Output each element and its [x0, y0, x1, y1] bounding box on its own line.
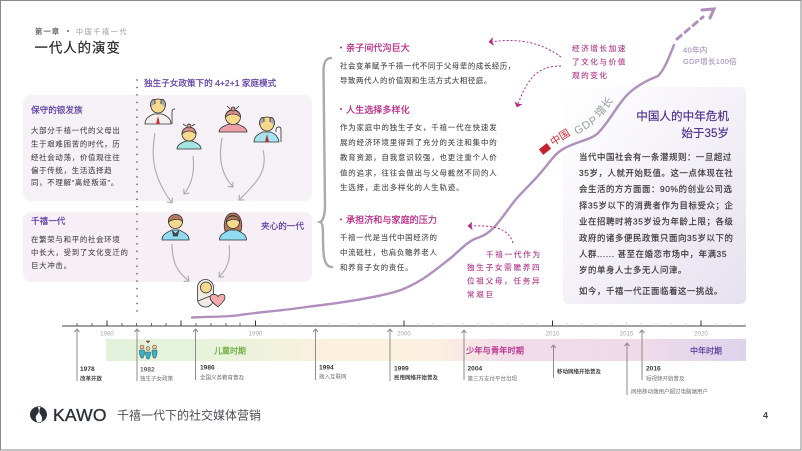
panel: millennials: 千禧一代	[31, 215, 66, 226]
GDP growth curve	[192, 9, 714, 318]
callout: supporting grandparents: 独生子女需赡养四	[467, 262, 541, 272]
panel: conservative elders: 偏于传统，生活选择趋	[31, 166, 112, 175]
event: 1994: 1994	[319, 364, 334, 372]
bracket	[320, 58, 332, 267]
event: 1994	[319, 364, 347, 380]
event: 2004: 第三方支付平台出现	[468, 374, 518, 382]
text block: diverse life choices: 展的经济环境里得到了充分的关注和集中的	[340, 138, 498, 147]
stage label: childhood: 儿童时期	[214, 346, 246, 356]
panel: midlife crisis: 岁的单身人士多无人问津。	[579, 265, 687, 275]
text block: diverse life choices: 教育资源，自我意识较强，也更注重个人价	[340, 153, 498, 162]
GDP note: GDP增长100倍	[683, 56, 737, 66]
family model heading: 独生子女政策下的 4+2+1 家庭模式	[144, 77, 277, 88]
icon: baby with heart	[198, 280, 225, 307]
page number: 4	[763, 410, 768, 420]
callout: supporting grandparents	[467, 249, 542, 299]
dotted arrow: burden	[468, 226, 513, 243]
text block: economic and family pressure: 千禧一代是当代中国经济的	[340, 233, 438, 242]
panel: millennials: 巨大冲击。	[31, 261, 72, 270]
event: 1986	[200, 364, 245, 382]
text block: economic and family pressure: 中流砥柱，也肩负赡养老人	[340, 248, 438, 257]
text block: generation gap	[340, 42, 516, 85]
curve label: China GDP growth	[548, 94, 616, 149]
chapter label	[35, 27, 128, 36]
panel: millennials: 在繁荣与和平的社会环境	[31, 235, 121, 244]
chapter label: 中国千禧一代	[76, 27, 128, 36]
GDP note	[683, 44, 737, 66]
callout: economy accelerates change: 经济增长加速	[572, 43, 627, 53]
curve label: China GDP growth: 增长	[591, 94, 616, 120]
callout: supporting grandparents: 常艰巨	[467, 290, 495, 299]
panel: conservative elders: 大部分千禧一代的父母出	[31, 126, 121, 135]
arrows: parents to child	[172, 244, 230, 281]
icon: grandfather right	[254, 117, 281, 142]
event: 1999: 1999	[394, 366, 409, 372]
KAWO logo: KAWO	[53, 405, 107, 425]
timeline axis: 1990	[249, 330, 263, 338]
event: 1994: 接入互联网	[319, 372, 347, 380]
panel: conservative elders: 保守的银发族	[31, 104, 83, 115]
text block: diverse life choices: 作为家庭中的独生子女，千禧一代在快速发	[340, 123, 498, 132]
sandwich generation label: 夹心的一代	[261, 220, 304, 231]
timeline axis: 2015	[620, 330, 634, 338]
callout: economy accelerates change	[572, 43, 627, 80]
icon: grandmother left	[177, 124, 201, 149]
panel: midlife crisis: 政府的诸多便民政策只面向35岁以下的	[579, 233, 733, 243]
text block: diverse life choices	[340, 104, 498, 192]
chapter label: 第一章	[35, 27, 60, 36]
timeline axis: 2000	[397, 330, 411, 338]
text block: generation gap: 社会变革赋予千禧一代不同于父母辈的成长经历，	[340, 62, 516, 70]
timeline axis: 1980	[100, 330, 114, 338]
event: 2016: 2016	[646, 366, 661, 372]
panel: millennials: 中长大，受到了文化变迁的	[31, 248, 129, 257]
event: 1982	[140, 366, 174, 382]
panel: millennials	[23, 212, 312, 282]
event: 2004: 2004	[468, 366, 483, 372]
icon: grandmother right	[219, 106, 247, 132]
timeline axis: 2020	[694, 330, 708, 338]
panel: midlife crisis	[563, 87, 746, 304]
callout: supporting grandparents: 位祖父母，任务异	[467, 276, 541, 286]
callout: economy accelerates change: 观的变化	[572, 70, 609, 80]
icon: grandfather left	[145, 99, 175, 124]
stage label: youth: 少年与青年时期	[466, 346, 524, 356]
footer title: 千禧一代下的社交媒体营销	[117, 408, 261, 422]
event: 1982: 独生子女政策	[140, 374, 174, 382]
panel: midlife crisis: 35岁，人就开始贬值。这一点体现在社	[579, 168, 733, 178]
title: 一代人的演变	[34, 40, 121, 56]
text block: economic and family pressure	[340, 214, 438, 272]
panel: midlife crisis: 会生活的方方面面：90%的创业公司选	[579, 184, 733, 194]
dotted arrows: culture change	[489, 41, 561, 107]
panel: conservative elders: 经社会动荡，价值观往往	[31, 153, 121, 162]
panel: midlife crisis: 择35岁以下的消费者作为目标受众；企	[579, 200, 733, 210]
timeline axis	[62, 320, 746, 338]
text block: economic and family pressure: 承担济和与家庭的压力	[346, 214, 437, 225]
icon: one-child family	[140, 341, 157, 359]
dotted divider	[136, 80, 138, 314]
timeline axis: 2010	[546, 330, 560, 338]
event: 1978: 1978	[80, 366, 95, 373]
event arrows	[74, 329, 644, 395]
panel: midlife crisis: 业在招聘时将35岁设为年龄上限；各级	[579, 216, 733, 226]
text block: economic and family pressure: 和养育子女的责任。	[340, 263, 413, 272]
text block: diverse life choices: 人生选择多样化	[346, 104, 410, 115]
event: 1978: 改革开放	[80, 374, 103, 382]
event: 2016	[646, 366, 685, 382]
event: 1978	[80, 366, 103, 382]
curve label: China GDP growth: 中国	[548, 126, 572, 149]
panel: midlife crisis: 当代中国社会有一条潜规则：一旦超过	[579, 152, 732, 162]
icon: China flag	[539, 143, 551, 155]
GDP note: 40年内	[683, 44, 708, 54]
stage label: middle age: 中年时期	[690, 346, 722, 356]
event: 1982: 1982	[140, 366, 155, 374]
icon: father	[162, 214, 189, 240]
callout: economy accelerates change: 了文化与价值	[572, 56, 627, 66]
life stage band	[106, 339, 746, 361]
event: 1986: 1986	[200, 364, 215, 372]
panel: conservative elders: 同，不理解“离经叛道”。	[31, 178, 119, 187]
event: 1999	[394, 366, 439, 382]
event: 2004	[468, 366, 518, 382]
panel: conservative elders: 生于艰难困苦的时代，历	[31, 140, 121, 148]
panel: midlife crisis: 中国人的中年危机	[636, 109, 729, 123]
icon: mother	[220, 213, 246, 240]
event: 2016: 短视频开始普及	[646, 374, 685, 382]
text block: diverse life choices: 生选择，走出多样化的人生轨迹。	[340, 183, 464, 192]
arrows: grandparents to parents	[153, 133, 264, 203]
panel: conservative elders	[23, 95, 312, 201]
event: 2015: 网络移动端用户超过电脑端用户	[631, 388, 708, 396]
panel: midlife crisis: 如今，千禧一代正面临着这一挑战。	[579, 286, 723, 296]
event: 2010: 移动网络开始普及	[557, 368, 602, 376]
event: 1999: 民用网络开始普及	[394, 374, 439, 382]
panel: midlife crisis: 始于35岁	[681, 126, 729, 140]
curve label: China GDP growth: GDP	[572, 114, 600, 138]
text block: generation gap: 亲子间代沟巨大	[346, 42, 410, 53]
KAWO logo	[30, 405, 107, 425]
panel: midlife crisis: 人群...... 甚至在婚恋市场中，年满35	[579, 249, 727, 259]
text block: generation gap: 导致两代人的价值观和生活方式大相径庭。	[340, 76, 492, 85]
event: 1986: 全国义务教育普及	[200, 374, 245, 382]
callout: supporting grandparents: 千禧一代作为	[486, 249, 542, 259]
text block: diverse life choices: 值的追求，往往会做出与父母截然不同的人	[340, 168, 498, 178]
